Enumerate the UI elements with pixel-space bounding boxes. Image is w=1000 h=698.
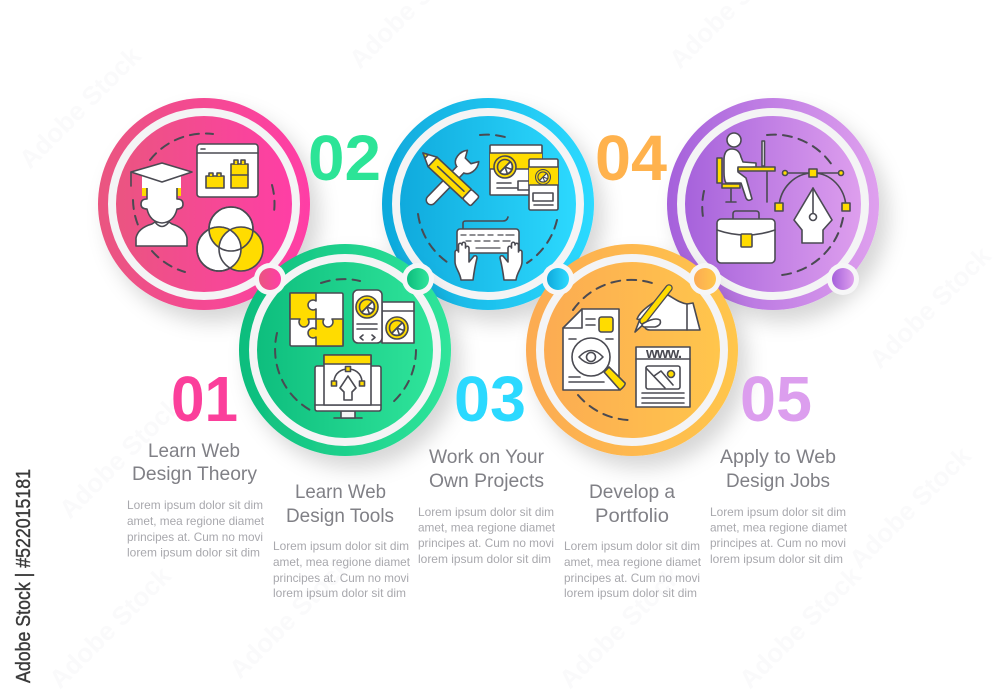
- text block: step 1: Lorem ipsum dolor sit dim: [127, 498, 263, 512]
- watermark pattern: Adobe Stock: [863, 240, 997, 374]
- heading: step 5: Apply to Web: [720, 446, 836, 468]
- heading: step 4: Develop a: [589, 481, 675, 503]
- text block: step 4: Lorem ipsum dolor sit dim: [564, 539, 700, 553]
- text block: step 5: Lorem ipsum dolor sit dim: [710, 505, 846, 519]
- number 01: 01: [171, 363, 238, 435]
- text block: step 1: lorem ipsum dolor sit dim: [127, 546, 260, 560]
- text block: step 2: amet, mea regione diamet: [273, 555, 411, 569]
- side credit text: Adobe Stock | #522015181: [13, 469, 35, 683]
- watermark pattern: Adobe Stock: [223, 550, 357, 684]
- panel: step 5 circle: [667, 98, 879, 310]
- text block: step 3: amet, mea regione diamet: [418, 520, 556, 534]
- number 04: 04: [595, 122, 667, 194]
- number 03: 03: [454, 363, 526, 435]
- text block: step 4: principes at. Cum no movi: [564, 571, 700, 585]
- watermark pattern: Adobe Stock: [843, 440, 977, 574]
- icon: puzzle: [290, 293, 343, 346]
- text block: step 5: principes at. Cum no movi: [710, 536, 846, 550]
- icon: document with magnifier and eye: [563, 309, 625, 390]
- heading: step 2: Design Tools: [286, 505, 394, 527]
- connector dot 1: [254, 263, 286, 295]
- connector dot 3: [542, 263, 574, 295]
- text block: step 1: [127, 498, 265, 560]
- heading: step 1: Design Theory: [132, 463, 257, 485]
- text block: step 2: Lorem ipsum dolor sit dim: [273, 539, 409, 553]
- icon: web layouts on desktop and mobile: [490, 145, 558, 210]
- icon: browser window with blocks: [197, 144, 258, 197]
- text block: step 3: principes at. Cum no movi: [418, 536, 554, 550]
- icon: venn diagram: [197, 207, 263, 271]
- panel: step 3 circle: [382, 98, 594, 310]
- number 05: 05: [740, 363, 812, 435]
- panel: step 2 circle: [239, 244, 451, 456]
- text block: step 4: amet, mea regione diamet: [564, 555, 702, 569]
- icon: hand writing with pen: [635, 288, 700, 332]
- heading: step 3: [429, 446, 544, 492]
- text block: step 5: amet, mea regione diamet: [710, 520, 848, 534]
- heading: step 4: [589, 481, 675, 527]
- text block: step 1: amet, mea regione diamet: [127, 514, 265, 528]
- watermark pattern: Adobe Stock: [553, 560, 687, 694]
- text block: step 5: [710, 505, 848, 566]
- watermark pattern: Adobe Stock: [13, 40, 147, 174]
- text block: step 3: [418, 505, 556, 566]
- icon: mobile and desktop layouts: [353, 290, 414, 343]
- icon: www web page: [636, 345, 690, 407]
- panel: step 4 circle: [526, 244, 738, 456]
- connector dot 5: [827, 263, 859, 295]
- text block: step 2: [273, 539, 411, 600]
- heading: step 1: Learn Web: [148, 440, 240, 462]
- icon: wrench and pencil: [419, 148, 481, 206]
- text block: step 5: lorem ipsum dolor sit dim: [710, 552, 843, 566]
- icon: www web page: www.: [645, 345, 682, 362]
- icon: vector pen tool: [775, 169, 850, 243]
- watermark pattern: Adobe Stock: [733, 560, 867, 694]
- heading: step 3: Own Projects: [429, 470, 544, 492]
- connector dot 4: [689, 263, 721, 295]
- watermark pattern: Adobe Stock: [53, 390, 187, 524]
- heading: step 3: Work on Your: [429, 446, 544, 468]
- number 02: 02: [308, 122, 381, 194]
- icon: hands on keyboard: [455, 217, 522, 280]
- text block: step 4: lorem ipsum dolor sit dim: [564, 586, 697, 600]
- connector dot 2: [402, 263, 434, 295]
- text block: step 3: lorem ipsum dolor sit dim: [418, 552, 551, 566]
- heading: step 4: Portfolio: [595, 505, 669, 527]
- text block: step 2: lorem ipsum dolor sit dim: [273, 586, 406, 600]
- text block: step 2: principes at. Cum no movi: [273, 571, 409, 585]
- heading: step 5: [720, 446, 836, 492]
- text block: step 4: [564, 539, 702, 600]
- icon: monitor with vector pen: [315, 355, 381, 418]
- heading: step 1: [132, 440, 257, 485]
- heading: step 2: [286, 481, 394, 527]
- icon: graduate student: [131, 163, 192, 246]
- watermark pattern: Adobe Stock: [43, 560, 177, 694]
- heading: step 2: Learn Web: [295, 481, 386, 503]
- icon: person working at desk: [717, 133, 775, 202]
- text block: step 1: principes at. Cum no movi: [127, 530, 263, 544]
- panel: step 1 circle: [98, 98, 310, 310]
- icon: briefcase: [717, 211, 775, 263]
- heading: step 5: Design Jobs: [726, 470, 830, 492]
- text block: step 3: Lorem ipsum dolor sit dim: [418, 505, 554, 519]
